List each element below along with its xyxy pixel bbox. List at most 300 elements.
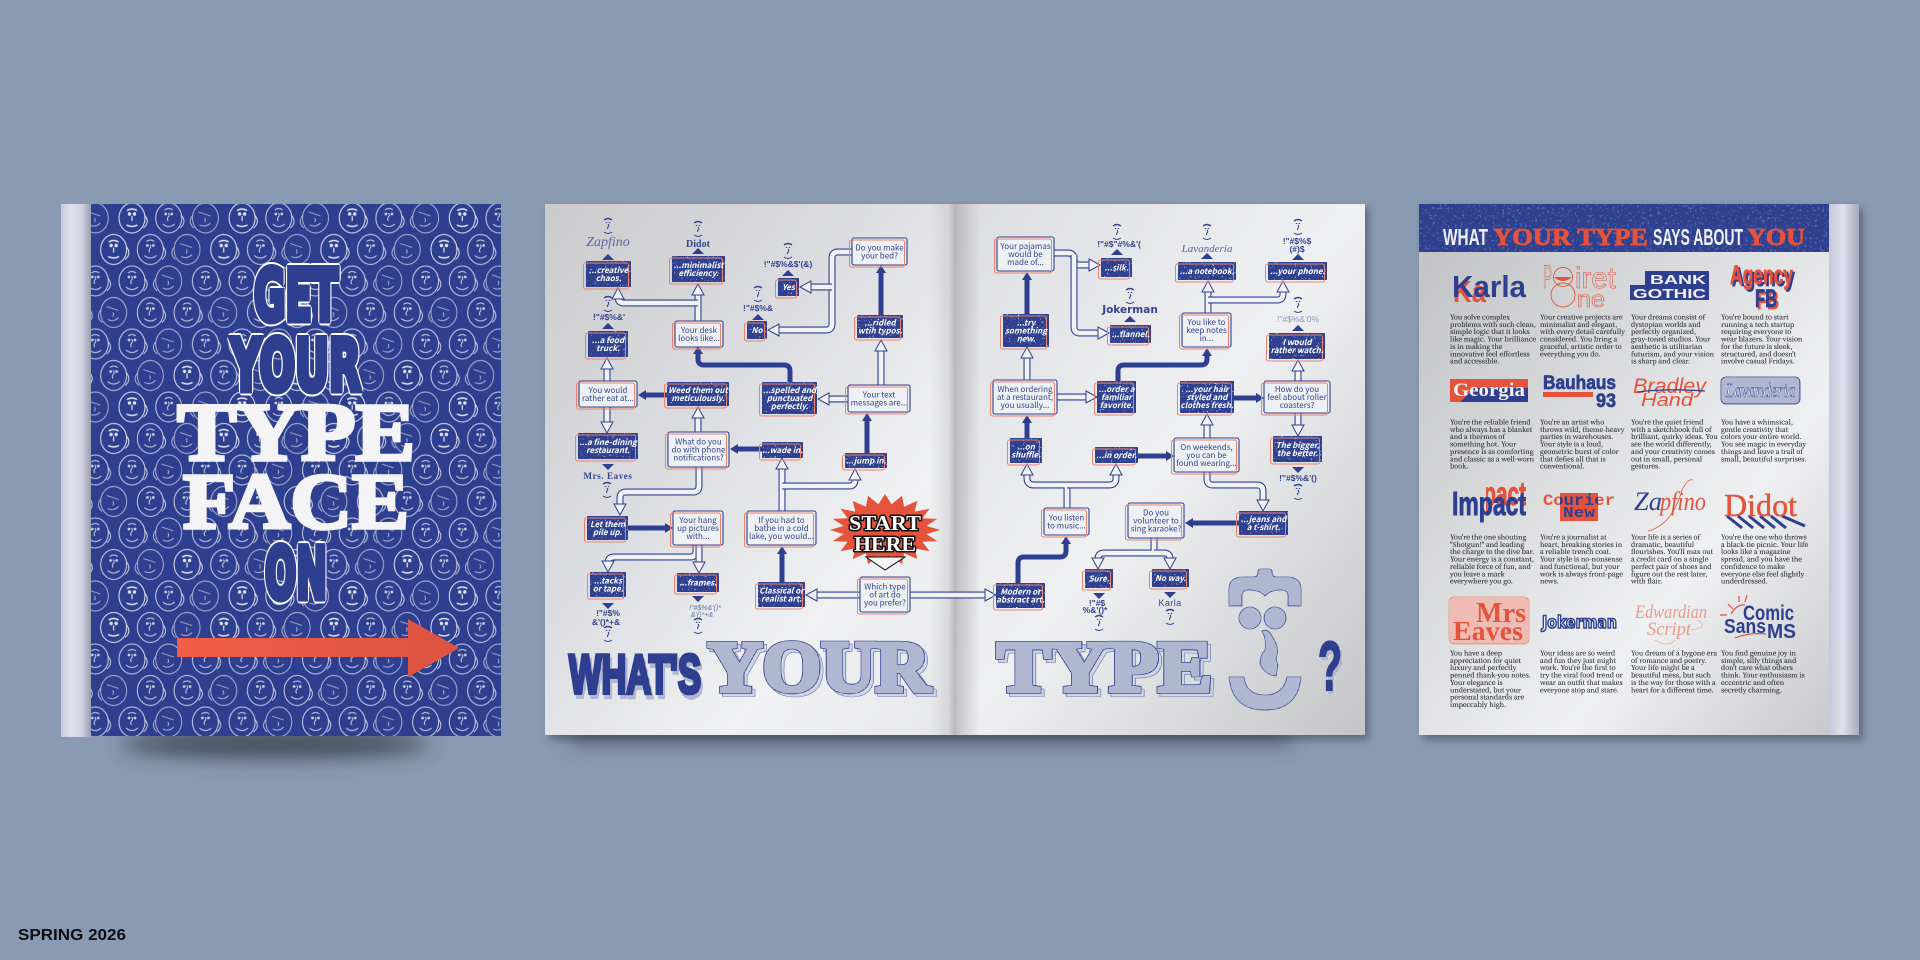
panel: cover page — [61, 204, 501, 758]
box: creative chaos — [584, 261, 631, 289]
entry: Comic Sans MS: eccentric and often — [1721, 677, 1785, 687]
result: frames glyphs: !"#$%&'()* — [689, 605, 721, 612]
arrow: desk to creative chaos — [618, 297, 698, 303]
entry: Lavanderia: You have a whimsical, — [1721, 416, 1793, 426]
logo: Edwardian Script — [1634, 602, 1707, 644]
heading: YOUR: YOUR — [708, 627, 931, 707]
entry: Karla: problems with such clean, — [1450, 319, 1536, 329]
box: familiar favorite — [1094, 381, 1136, 415]
box: weed them out: meticulously. — [671, 393, 725, 404]
entry: Georgia: something hot. Your — [1450, 439, 1517, 449]
cover background with face pattern — [91, 204, 501, 736]
box: on shuffle: shuffle. — [1011, 450, 1041, 460]
entry: Agency FB: involve casual Fridays. — [1721, 356, 1795, 366]
entry: Courier New: and functional, but your — [1540, 561, 1621, 571]
entry: Impact: reliable force of fun, and — [1450, 561, 1532, 571]
box: try something new: new. — [1017, 334, 1036, 344]
entry: Courier New: Your style is no-nonsense — [1540, 554, 1623, 564]
box: keep notes: in... — [1200, 333, 1213, 344]
box: classical: realist art. — [761, 594, 802, 604]
logo: Courier New: New — [1563, 505, 1595, 522]
result: sure glyphs — [1083, 593, 1108, 630]
entry: Zapfino: a credit card on a single — [1631, 554, 1709, 564]
box: which type of art — [858, 577, 910, 614]
arrow: listen to shuffle — [1027, 473, 1067, 508]
panel: what your type says about you — [1419, 204, 1863, 740]
arrow: spelled to desk — [698, 353, 790, 382]
arrow: modern to listen — [1018, 543, 1066, 583]
entry: Bank Gothic — [1630, 271, 1715, 366]
entry: Edwardian Script: You dream of a bygone era — [1631, 648, 1717, 658]
entry: Lavanderia: things and leave a trail of — [1721, 446, 1804, 456]
box: wade in: ...wade in. — [762, 445, 803, 456]
box: no: No — [752, 325, 763, 336]
box: roller coasters — [1262, 381, 1330, 415]
box: try something new: ...try — [1017, 318, 1035, 328]
entry: Agency FB: You're bound to start — [1721, 312, 1789, 322]
entry: Bradley Hand: out in small, personal — [1631, 453, 1702, 463]
entry: Didot: You're the one who throws — [1721, 532, 1807, 542]
box: classical: Classical or — [759, 586, 804, 596]
box: in order: ...in order. — [1096, 450, 1137, 461]
box: modern: abstract art. — [996, 594, 1045, 606]
box: your desk: looks like... — [678, 333, 720, 344]
box: cold lake: lake, you would... — [749, 531, 814, 542]
box: flannel — [1108, 325, 1151, 345]
entry: Bank Gothic: gray-toned studios. Your — [1631, 334, 1711, 344]
cover title: YOUR — [230, 325, 361, 407]
entry: Jokerman: Your ideas are so weird — [1540, 648, 1615, 658]
logo: Bank Gothic: GOTHIC — [1633, 286, 1707, 301]
box: karaoke: Do you — [1143, 508, 1169, 518]
entry: Bauhaus 93 — [1540, 373, 1625, 471]
entry: Agency FB: wear blazers. Your vision — [1720, 334, 1803, 344]
box: ordering at restaurant: When ordering — [998, 384, 1052, 395]
box: cold lake: If you had to — [758, 515, 805, 526]
box: familiar favorite: familiar — [1101, 392, 1133, 403]
arrow: rather eat to fine dining — [604, 407, 610, 424]
arrow: desk to minimalist — [694, 293, 702, 321]
entry: Impact: you leave a mark — [1449, 568, 1506, 578]
entry: Agency FB: structured, and doesn't — [1721, 348, 1797, 358]
logo: Bradley Hand — [1633, 375, 1708, 410]
header title: SAYS ABOUT — [1653, 224, 1743, 250]
result: tacks glyphs: &'()*+& — [592, 617, 620, 627]
heading: YOUR: YOUR — [708, 627, 931, 707]
entry: Mrs Eaves: Your elegance is — [1450, 677, 1503, 687]
entry: Zapfino: Your life is a series of — [1631, 532, 1700, 542]
logo: Karla: Karla — [1452, 269, 1527, 304]
result: Zapfino: Zapfino — [586, 235, 630, 250]
arrow: pictures to frames — [696, 545, 702, 564]
box: hair styled: ...your hair — [1185, 384, 1229, 395]
arrow: bed to no — [777, 252, 852, 330]
logo: Comic Sans MS: Comic — [1743, 602, 1794, 625]
entry: Didot: spread, and you have the — [1721, 554, 1802, 564]
logo: Bank Gothic — [1630, 271, 1709, 301]
box: the bigger: The bigger, — [1276, 440, 1319, 451]
entry: Agency FB: running a tech startup — [1721, 319, 1794, 329]
entry: Georgia: presence is as comforting — [1450, 446, 1534, 456]
entry: Bank Gothic: Your dreams consist of — [1631, 312, 1705, 322]
arrow: listen to in order — [1067, 473, 1116, 485]
logo: Georgia: Georgia — [1453, 380, 1526, 401]
box: hang up pictures: Your hang — [679, 515, 717, 526]
logo: Bradley Hand: Bradley — [1633, 375, 1708, 398]
box: on weekends: found wearing... — [1176, 458, 1237, 469]
box: pajamas — [994, 237, 1054, 273]
entry: Bank Gothic: perfectly organized, — [1631, 326, 1696, 336]
box: creative chaos: ...creative — [589, 265, 628, 276]
heading: TYPE: TYPE — [1000, 630, 1215, 710]
logo: Poiret One: P — [1543, 259, 1552, 295]
box: classical — [756, 582, 805, 609]
box: spelled: ...spelled and — [763, 385, 816, 396]
box: hang up pictures: up pictures — [677, 523, 719, 534]
header title: WHAT — [1443, 224, 1488, 250]
result: no glyphs — [743, 286, 773, 320]
arrow: weekends to jeans — [1207, 472, 1263, 502]
box: no way: No way. — [1155, 573, 1186, 584]
result labels with faces — [584, 218, 1319, 642]
box: pajamas: made of... — [1007, 257, 1044, 268]
box: frames — [674, 573, 719, 594]
arrow: notes to phone — [1208, 290, 1283, 300]
box: do you make your bed — [850, 238, 907, 267]
entry: Didot: looks like a magazine — [1721, 546, 1791, 556]
result: tacks glyphs: !"#$% — [596, 608, 620, 618]
entry: Courier New: a reliable trench coat. — [1540, 546, 1611, 556]
box: karaoke: volunteer to — [1133, 516, 1179, 526]
cover title: GET — [254, 255, 338, 337]
arrow: weekends to hair — [1204, 423, 1210, 438]
logo: Agency FB — [1730, 260, 1795, 315]
arrow: hair to coasters — [1234, 396, 1257, 400]
box: silk — [1098, 258, 1132, 279]
entry: Impact: Your energy is a constant, — [1450, 554, 1534, 564]
box: on weekends — [1172, 438, 1239, 474]
box: on weekends: On weekends, — [1180, 442, 1233, 453]
box: no — [744, 321, 767, 341]
entry: Jokerman: wear an outfit that makes — [1539, 677, 1623, 687]
entry: Georgia — [1449, 379, 1535, 471]
edition label: SPRING 2026 — [18, 927, 126, 944]
page background — [1419, 204, 1829, 735]
entry: Agency FB: requiring everyone to — [1721, 326, 1791, 336]
box: notebook — [1176, 262, 1236, 282]
heading: YOUR: YOUR — [711, 630, 934, 710]
result: Didot — [686, 222, 711, 254]
cover title: GET — [254, 255, 338, 337]
arrow: restaurant to try — [1024, 356, 1030, 380]
logo: Bauhaus 93: Bauhaus — [1543, 373, 1616, 394]
box: minimalist efficiency: efficiency. — [678, 268, 719, 279]
result: Lavanderia: Lavanderia — [1181, 243, 1233, 255]
entry: Bank Gothic: dystopian worlds and — [1631, 319, 1702, 329]
entry: Poiret One: with every detail carefully — [1539, 326, 1625, 336]
entry: Georgia: who always has a blanket — [1449, 424, 1533, 434]
arrow: let them to pictures — [628, 526, 666, 530]
entry: Georgia: book. — [1450, 461, 1468, 471]
result: phone glyphs: (#)$ — [1289, 244, 1305, 254]
box: listen to music — [1042, 508, 1089, 537]
logo: Courier New: Courier — [1543, 492, 1615, 510]
result: food truck glyphs — [593, 296, 625, 329]
header title: YOU — [1747, 225, 1805, 251]
entry: Zapfino: figure out the rest later, — [1631, 568, 1707, 578]
heading: TYPE: TYPE — [997, 627, 1212, 707]
arrow: jeans to karaoke — [1192, 520, 1239, 526]
box: rather watch: I would — [1282, 337, 1312, 348]
arrow: rather eat to food truck — [604, 367, 610, 381]
entry: Courier New: news. — [1540, 576, 1559, 586]
box: food truck: truck. — [596, 343, 620, 354]
box: silk: ...silk. — [1104, 262, 1129, 274]
logo: Courier New — [1543, 492, 1615, 522]
result: Zapfino — [586, 218, 630, 260]
entry: Poiret One: graceful, artistic order to — [1540, 341, 1622, 351]
box: try something new — [1000, 314, 1049, 349]
entry: Jokerman — [1539, 613, 1624, 694]
entry: Zapfino: with flair. — [1630, 576, 1662, 586]
logo: Poiret One: ne — [1577, 286, 1605, 312]
entry: Bauhaus 93: parties in warehouses. — [1540, 431, 1613, 441]
entry: Karla: simple logic that it looks — [1450, 326, 1530, 336]
arrow: jump to messages — [864, 420, 870, 453]
heading: question mark: ? — [1318, 627, 1342, 705]
box: which type of art: of art do — [869, 590, 901, 600]
logo: Mrs Eaves — [1449, 597, 1529, 646]
entry: Comic Sans MS: secretly charming. — [1721, 684, 1782, 694]
entry: Bradley Hand: and your creativity comes — [1631, 446, 1715, 456]
logo: Mrs Eaves: Mrs — [1476, 598, 1526, 629]
box: jump in: ...jump in. — [846, 456, 887, 466]
box: hair styled: clothes fresh. — [1180, 400, 1234, 411]
heading: WHAT'S — [569, 643, 703, 709]
page shadow — [1423, 208, 1863, 740]
entry: Agency FB: for the future is sleek, — [1721, 341, 1793, 351]
result: yes glyphs — [764, 244, 812, 276]
logo: Comic Sans MS: MS — [1767, 621, 1796, 643]
entry: Comic Sans MS — [1720, 595, 1805, 694]
spread drop shadow — [549, 208, 1369, 745]
result: Mrs. Eaves — [584, 464, 632, 498]
logo: Karla: Ka — [1453, 274, 1487, 309]
entry: Bradley Hand: You're the quiet friend — [1631, 416, 1704, 426]
entry: Didot: confidence to make — [1721, 561, 1785, 571]
box: the bigger: the better. — [1277, 448, 1318, 459]
entry: Georgia: and classic as a well-worn — [1450, 453, 1535, 463]
logo: Edwardian Script: Edwardian — [1634, 602, 1707, 623]
box: modern — [994, 583, 1045, 610]
heading: TYPE: TYPE — [1000, 630, 1215, 710]
result: Karla — [1158, 592, 1182, 624]
box: keep notes: You like to — [1187, 317, 1226, 328]
entry: Courier New: work is always front-page — [1539, 568, 1623, 578]
arrow: coasters to bigger — [1294, 413, 1302, 427]
box: weed them out: Weed them out — [668, 385, 728, 396]
logo: Bradley Hand: Hand — [1641, 390, 1694, 410]
box: tacks or tape — [588, 572, 626, 599]
result: silk glyphs: !"#$"#%&'( — [1097, 239, 1141, 249]
box: hang up pictures — [670, 511, 723, 547]
box: rather eat: rather eat at... — [582, 393, 634, 404]
box: text messages: Your text — [863, 390, 895, 400]
box: ridled with typos — [854, 315, 903, 340]
flowchart arrows — [607, 252, 1298, 595]
entry: Lavanderia: You see magic in everyday — [1721, 439, 1806, 449]
entry: Karla: like magic. Your brilliance — [1450, 334, 1536, 344]
right page — [956, 204, 1365, 735]
entry: Bank Gothic: aesthetic is utilitarian — [1631, 341, 1703, 351]
logo: Impact — [1453, 482, 1526, 522]
box: let them pile up: Let them — [590, 519, 625, 530]
cover title: YOUR — [230, 325, 361, 407]
box: which type of art: Which type — [864, 582, 906, 592]
heading: YOUR: YOUR — [711, 630, 934, 710]
box: the bigger — [1270, 436, 1322, 464]
entry: Lavanderia: gentle creativity that — [1721, 424, 1789, 434]
result: tacks glyphs — [592, 603, 620, 642]
box: rather watch: rather watch. — [1271, 345, 1324, 356]
logo: Bauhaus 93: 93 — [1596, 391, 1616, 412]
result: no glyphs: !"#$%& — [743, 303, 773, 313]
box: which type of art: you prefer? — [864, 598, 906, 608]
entry: Jokerman: everyone stop and stare. — [1540, 684, 1619, 694]
box: phone notifications: What do you — [675, 436, 722, 448]
arrow: try to pajamas — [1024, 279, 1030, 314]
box: in order — [1092, 447, 1138, 465]
entry: Lavanderia — [1721, 377, 1806, 463]
cover title: TYPE — [177, 386, 415, 478]
left page — [545, 204, 956, 735]
logo: Poiret One — [1543, 259, 1617, 312]
result: frames glyphs — [689, 596, 721, 634]
box: fine dining: restaurant. — [586, 445, 630, 456]
entry: Jokerman: and fun they just might — [1540, 655, 1617, 665]
box: text messages — [846, 385, 910, 414]
arrow: messages to spelled — [827, 396, 848, 402]
entry: Bradley Hand: with a sketchbook full of — [1630, 424, 1713, 434]
entry: Mrs Eaves: understated, but your — [1450, 684, 1522, 694]
result: Jokerman: Jokerman — [1101, 304, 1158, 316]
box: yes — [776, 278, 799, 298]
box: cold lake — [744, 511, 816, 547]
arrow: typos to bed — [878, 272, 884, 315]
entry: Jokerman: try the viral food trend or — [1540, 670, 1624, 680]
box: wade in — [760, 442, 803, 460]
logo: Impact: Impact — [1459, 475, 1526, 512]
header title — [1443, 224, 1805, 251]
entry: Edwardian Script: Your life might be a — [1631, 662, 1695, 672]
box: text messages: messages are... — [851, 398, 907, 408]
arrow: lake to wade — [778, 467, 786, 511]
result: Mrs. Eaves: Mrs. Eaves — [584, 471, 632, 481]
entry: Edwardian Script: of romance and poetry. — [1631, 655, 1707, 665]
entry: Zapfino: dramatic, beautiful — [1631, 539, 1694, 549]
arrow: karaoke to sure — [1098, 538, 1154, 560]
logo: Impact: Impact — [1452, 485, 1526, 522]
box: try something new: something — [1005, 326, 1048, 336]
box: keep notes — [1180, 313, 1231, 349]
box: creative chaos: chaos. — [596, 273, 622, 284]
result: yes glyphs: !"#$%&$'(&) — [764, 259, 812, 269]
logo: Lavanderia: Lavanderia — [1725, 380, 1795, 402]
box: ordering at restaurant: you usually... — [1001, 400, 1049, 411]
box: food truck — [586, 331, 628, 359]
box: roller coasters: feel about roller — [1267, 392, 1328, 403]
box: on shuffle: ...on — [1017, 442, 1035, 452]
box: notebook: ...a notebook. — [1180, 266, 1235, 277]
entry: Zapfino: perfect pair of shoes and — [1631, 561, 1712, 571]
cover arrow — [177, 619, 459, 677]
result: frames glyphs: &'()*+& — [691, 612, 713, 619]
entry: Edwardian Script: is the way for those with a — [1631, 677, 1716, 687]
box: tacks or tape: ...tacks — [594, 576, 622, 586]
entry: Impact: the charge to the dive bar. — [1450, 546, 1534, 556]
logo: Comic Sans MS — [1720, 595, 1796, 643]
box: ridled with typos: ...ridled — [864, 318, 896, 328]
entry: Impact — [1449, 475, 1534, 586]
heading icon: big face — [1229, 569, 1301, 710]
entry: Comic Sans MS: don't care what others — [1721, 662, 1793, 672]
arrow: in order to weekends — [1138, 454, 1167, 458]
logo: Courier New: Courier — [1543, 492, 1615, 510]
logo: Edwardian Script: Script — [1647, 619, 1692, 640]
start here burst: START — [849, 511, 921, 535]
box: karaoke — [1126, 503, 1184, 540]
entry: Edwardian Script: heart for a different time. — [1631, 684, 1714, 694]
box: ordering at restaurant: at a restaurant, — [997, 392, 1053, 403]
box: ordering at restaurant — [990, 380, 1057, 416]
start here burst — [830, 494, 940, 570]
cover title: FACE — [183, 459, 409, 546]
logo: Comic Sans MS: Sans — [1724, 616, 1766, 638]
result: sure glyphs: !"#$ — [1089, 598, 1105, 608]
box: karaoke: sing karaoke? — [1131, 524, 1182, 534]
box: food truck: ...a food — [592, 335, 624, 346]
box: your desk: Your desk — [681, 325, 717, 336]
result: watch glyphs: !"#$%&'0% — [1277, 314, 1319, 324]
arrow: classical to lake — [780, 553, 784, 582]
box: your desk — [672, 321, 723, 349]
arrow: lake to jump — [782, 478, 855, 486]
box: pajamas: would be — [1008, 249, 1043, 260]
entry: Courier New: You're a journalist at — [1540, 532, 1607, 542]
box: hair styled: styled and — [1187, 392, 1229, 403]
entry: Zapfino — [1630, 480, 1714, 586]
start here burst: HERE — [854, 532, 916, 556]
box: hair styled — [1178, 381, 1234, 415]
logo: Agency FB: FB — [1757, 287, 1779, 315]
arrow: pajamas to flannel — [1074, 255, 1100, 333]
logo: Agency FB: FB — [1755, 285, 1777, 313]
box: let them pile up — [584, 516, 628, 542]
arrow: phone to weed — [694, 416, 702, 432]
box: do you make your bed: your bed? — [861, 250, 898, 262]
arrow: coasters to watch — [1294, 369, 1302, 381]
entry: Karla: You solve complex — [1450, 312, 1510, 322]
box: minimalist efficiency: ...minimalist — [673, 260, 724, 271]
entry: Lavanderia: colors your entire world. — [1721, 431, 1802, 441]
box: rather eat — [576, 381, 637, 409]
arrow: pajamas to silk — [1054, 253, 1091, 265]
page spine — [1829, 204, 1859, 735]
logo: Zapfino — [1634, 480, 1706, 531]
logo: Agency FB: Agency — [1730, 260, 1793, 290]
box: spelled — [760, 382, 818, 416]
result: Jokerman — [1101, 288, 1158, 322]
